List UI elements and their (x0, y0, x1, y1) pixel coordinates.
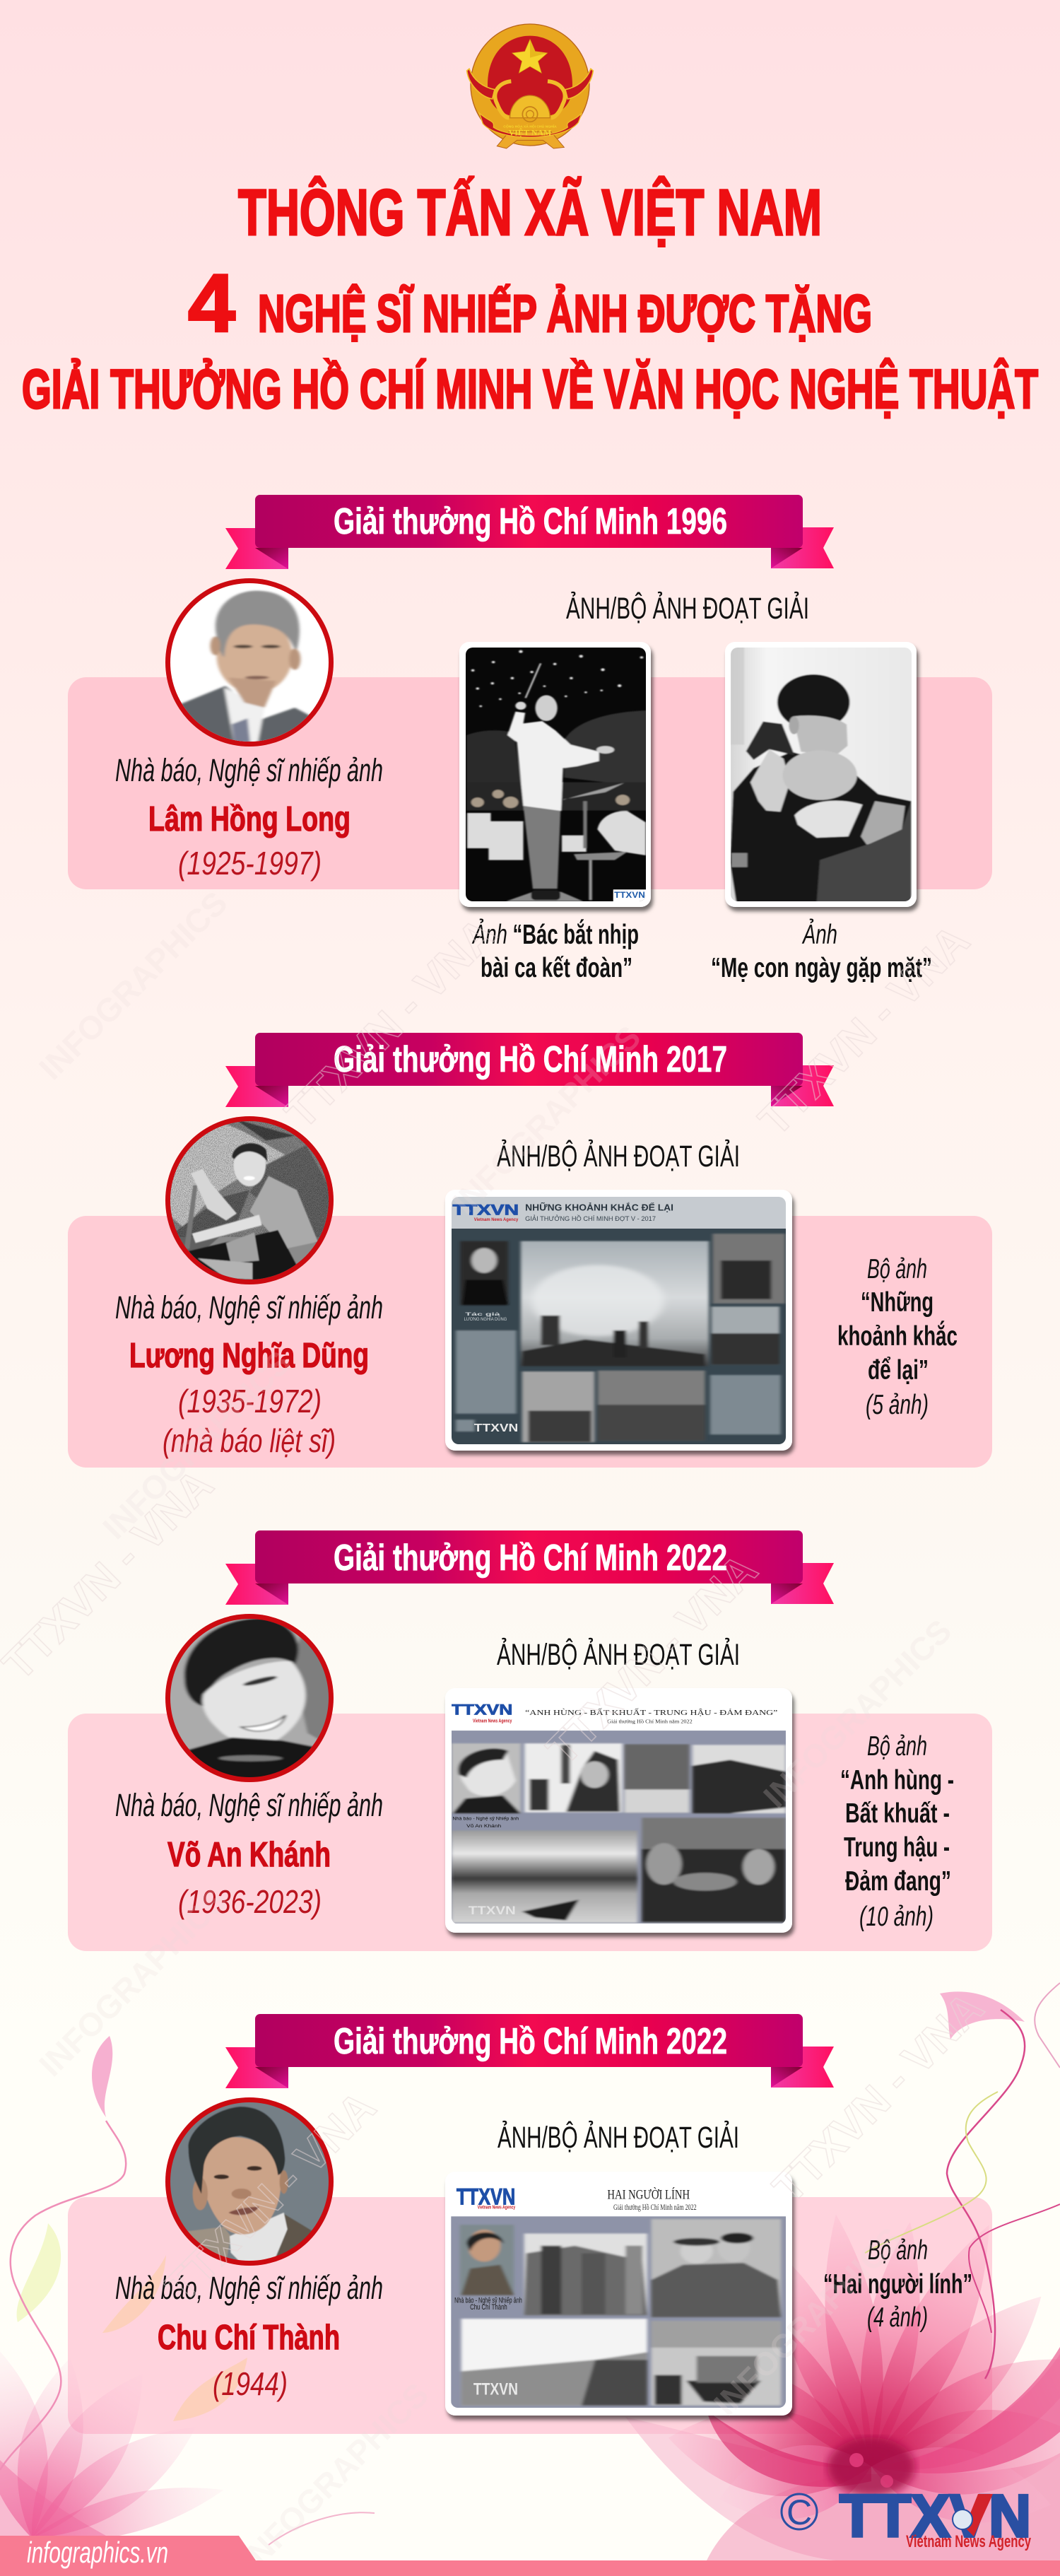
caption: photo set 4: (4 ảnh) (867, 2302, 928, 2333)
caption: photo 1: bài ca kết đoàn” (481, 953, 632, 983)
ribbon heading 2017 (225, 1033, 834, 1107)
person text: Võ An Khánh (167, 1836, 331, 1874)
heading: winning photos: ẢNH/BỘ ẢNH ĐOẠT GIẢI (497, 2120, 739, 2155)
photo board: Hai nguoi linh: Chu Chí Thành (470, 2302, 507, 2312)
photo: mother and son (725, 642, 917, 907)
caption: photo set 2: “Những (861, 1287, 934, 1318)
photo board: Hai nguoi linh: TTXVN (473, 2380, 518, 2399)
national emblem of Vietnam (467, 24, 593, 148)
TTXVN wordmark: TTXVN (840, 2483, 1031, 2549)
caption: photo set 4: “Hai người lính” (823, 2269, 972, 2300)
caption: photo 2 (711, 918, 932, 983)
photo board: Nhung khoanh khac de lai: NHỮNG KHOẢNH KHẮC ĐỂ LẠI (525, 1202, 673, 1213)
caption: photo set 3 (840, 1731, 954, 1932)
photo board: Hai nguoi linh: HAI NGƯỜI LÍNH (607, 2187, 690, 2202)
watermarks: TTXVN - VNA (750, 916, 979, 1145)
watermarks: TTXVN - VNA (276, 909, 505, 1138)
person text (115, 1787, 383, 1920)
caption: photo set 3: Trung hậu - (844, 1832, 950, 1863)
caption: photo set 3: Bất khuất - (845, 1798, 950, 1829)
globe and red stroke (953, 2494, 993, 2536)
photo board: Hai nguoi linh: TTXVN (457, 2184, 515, 2210)
section 3: Vo An Khanh (115, 1530, 954, 1933)
title block (22, 176, 1038, 420)
photo board: Hai nguoi linh: Nhà báo - Nghệ sỹ Nhiếp ảnh (454, 2296, 522, 2305)
person text: (nhà báo liệt sĩ) (163, 1422, 336, 1459)
national emblem of Vietnam: VIỆT NAM (509, 128, 551, 138)
caption: photo set 4: Bộ ảnh (868, 2235, 928, 2266)
ribbon heading 1996 (225, 495, 834, 569)
person text: Lâm Hồng Long (148, 800, 351, 838)
caption: photo set 2: Bộ ảnh (867, 1254, 927, 1284)
photo board: Anh hung bat khuat: TTXVN (469, 1904, 516, 1917)
section 1: Lam Hong Long (115, 495, 932, 983)
person text: (1936-2023) (178, 1883, 322, 1920)
watermarks: INFOGRAPHICS (445, 1019, 647, 1221)
watermarks: INFOGRAPHICS (233, 2376, 435, 2576)
watermarks: TTXVN - VNA (764, 1984, 993, 2213)
caption: photo 1 (472, 918, 639, 983)
portrait: Chu Chi Thanh (165, 2097, 334, 2267)
watermarks: INFOGRAPHICS (32, 884, 234, 1087)
caption: photo set 2: (5 ảnh) (866, 1390, 929, 1420)
ribbon heading 2017: Giải thưởng Hồ Chí Minh 2017 (334, 1039, 727, 1080)
caption: photo set 3: Đảm đang” (845, 1866, 951, 1897)
photo board: Nhung khoanh khac de lai: GIẢI THƯỞNG HỒ CHÍ MINH ĐỢT V - 2017 (525, 1215, 656, 1222)
photo board: Hai nguoi linh: Vietnam News Agency (478, 2205, 515, 2211)
photo board: Anh hung bat khuat: Võ An Khánh (466, 1824, 501, 1829)
caption: photo set 3: (10 ảnh) (859, 1902, 934, 1932)
photo board: Nhung khoanh khac de lai: Vietnam News Agency (474, 1217, 519, 1222)
person text: (1944) (213, 2365, 288, 2402)
person text (115, 752, 383, 882)
caption: photo 2: Ảnh (802, 918, 837, 950)
watermarks: INFOGRAPHICS (95, 1344, 298, 1546)
portrait: Vo An Khanh (163, 1611, 339, 1784)
photo board: Anh hung bat khuat: Vietnam News Agency (473, 1718, 512, 1724)
watermarks: INFOGRAPHICS (756, 1612, 958, 1815)
panel: row background 4 (68, 2197, 992, 2434)
watermarks (0, 884, 993, 2576)
person text: Nhà báo, Nghệ sĩ nhiếp ảnh (115, 2270, 383, 2306)
title number 4: 4 (188, 257, 235, 349)
watermarks: TTXVN - VNA (0, 1460, 223, 1690)
panel: row background 3 (68, 1714, 992, 1951)
ribbon heading 2022 (225, 2014, 834, 2088)
photo board: Hai nguoi linh: Giải thưởng Hồ Chí Minh năm 2022 (613, 2203, 697, 2212)
TTXVN logo (782, 2483, 1031, 2551)
photo board: Anh hung bat khuat: Nhà báo - Nghệ sỹ Nhiếp ảnh (452, 1816, 519, 1821)
heading: winning photos: ẢNH/BỘ ẢNH ĐOẠT GIẢI (497, 1139, 740, 1173)
footer website: infographics.vn (27, 2536, 168, 2569)
watermarks: TTXVN - VNA (538, 1545, 767, 1774)
caption: photo set 4 (823, 2235, 972, 2333)
heading: winning photos: ẢNH/BỘ ẢNH ĐOẠT GIẢI (566, 591, 809, 626)
ribbon heading 2022 (225, 1530, 834, 1605)
ribbon heading 2022: Giải thưởng Hồ Chí Minh 2022 (334, 2021, 727, 2062)
heading: winning photos: ẢNH/BỘ ẢNH ĐOẠT GIẢI (497, 1637, 740, 1672)
person text: Lương Nghĩa Dũng (129, 1337, 369, 1375)
person text (115, 1289, 383, 1459)
photo board: Nhung khoanh khac de lai: Tác giả (465, 1311, 501, 1317)
caption: photo set 2: để lại” (868, 1355, 929, 1386)
person text: Chu Chí Thành (158, 2319, 340, 2357)
caption: photo 2: “Mẹ con ngày gặp mặt” (711, 953, 932, 983)
photo board: Anh hung bat khuat: TTXVN (452, 1702, 512, 1718)
portrait: Lam Hong Long (165, 578, 334, 751)
decoration: floating petals and curved lines (0, 1983, 1060, 2545)
photo board: Anh hung bat khuat: “ANH HÙNG - BẤT KHUẤT - TRUNG HẬU - ĐẢM ĐANG” (525, 1708, 777, 1717)
photo board: Nhung khoanh khac de lai: TTXVN (474, 1422, 518, 1434)
person text (115, 2270, 383, 2402)
ribbon heading 1996: Giải thưởng Hồ Chí Minh 1996 (334, 501, 727, 542)
section 4: Chu Chi Thanh (115, 2014, 972, 2416)
caption: photo set 2 (837, 1254, 958, 1420)
person text: (1935-1972) (178, 1383, 322, 1419)
watermarks: INFOGRAPHICS (707, 2220, 909, 2423)
title line 1: THÔNG TẤN XÃ VIỆT NAM (238, 176, 822, 249)
caption: photo 1: Ảnh “Bác bắt nhịp (472, 918, 639, 950)
ribbon heading 2022: Giải thưởng Hồ Chí Minh 2022 (334, 1538, 727, 1579)
photo board: Hai nguoi linh (445, 2172, 792, 2416)
person text: Nhà báo, Nghệ sĩ nhiếp ảnh (115, 1787, 383, 1823)
photo: conductor: TTXVN (614, 891, 645, 900)
panel: row background 2 (68, 1216, 992, 1468)
watermarks: INFOGRAPHICS (32, 1881, 234, 2083)
caption: photo set 3: “Anh hùng - (840, 1765, 954, 1796)
person text: Nhà báo, Nghệ sĩ nhiếp ảnh (115, 1289, 383, 1325)
person text: (1925-1997) (178, 845, 322, 882)
panel: row background 1 (68, 677, 992, 889)
caption: photo set 2: khoảnh khắc (837, 1321, 958, 1352)
copyright symbol: C (787, 2493, 812, 2532)
national emblem of Vietnam: CỘNG HÒA XÃ HỘI CHỦ NGHĨA (503, 124, 557, 129)
photo board: Anh hung bat khuat: Giải thưởng Hồ Chí Minh năm 2022 (607, 1719, 693, 1724)
photo board: Nhung khoanh khac de lai: TTXVN (452, 1202, 519, 1218)
caption: photo set 3: Bộ ảnh (867, 1731, 927, 1762)
footer bar (0, 2536, 1060, 2576)
photo board: Nhung khoanh khac de lai: LƯƠNG NGHĨA DŨNG (464, 1316, 507, 1322)
decoration: lotus flower bottom right (625, 2211, 1060, 2562)
person text: Nhà báo, Nghệ sĩ nhiếp ảnh (115, 752, 383, 788)
portrait: Luong Nghia Dung (165, 1115, 334, 1284)
watermarks: TTXVN - VNA (156, 2083, 385, 2312)
photo: conductor (459, 642, 651, 907)
decoration: lotus flower bottom left (0, 2345, 228, 2560)
section 2: Luong Nghia Dung (115, 1033, 958, 1459)
photo board: Nhung khoanh khac de lai (445, 1190, 792, 1451)
photo board: Anh hung bat khuat (445, 1688, 792, 1933)
